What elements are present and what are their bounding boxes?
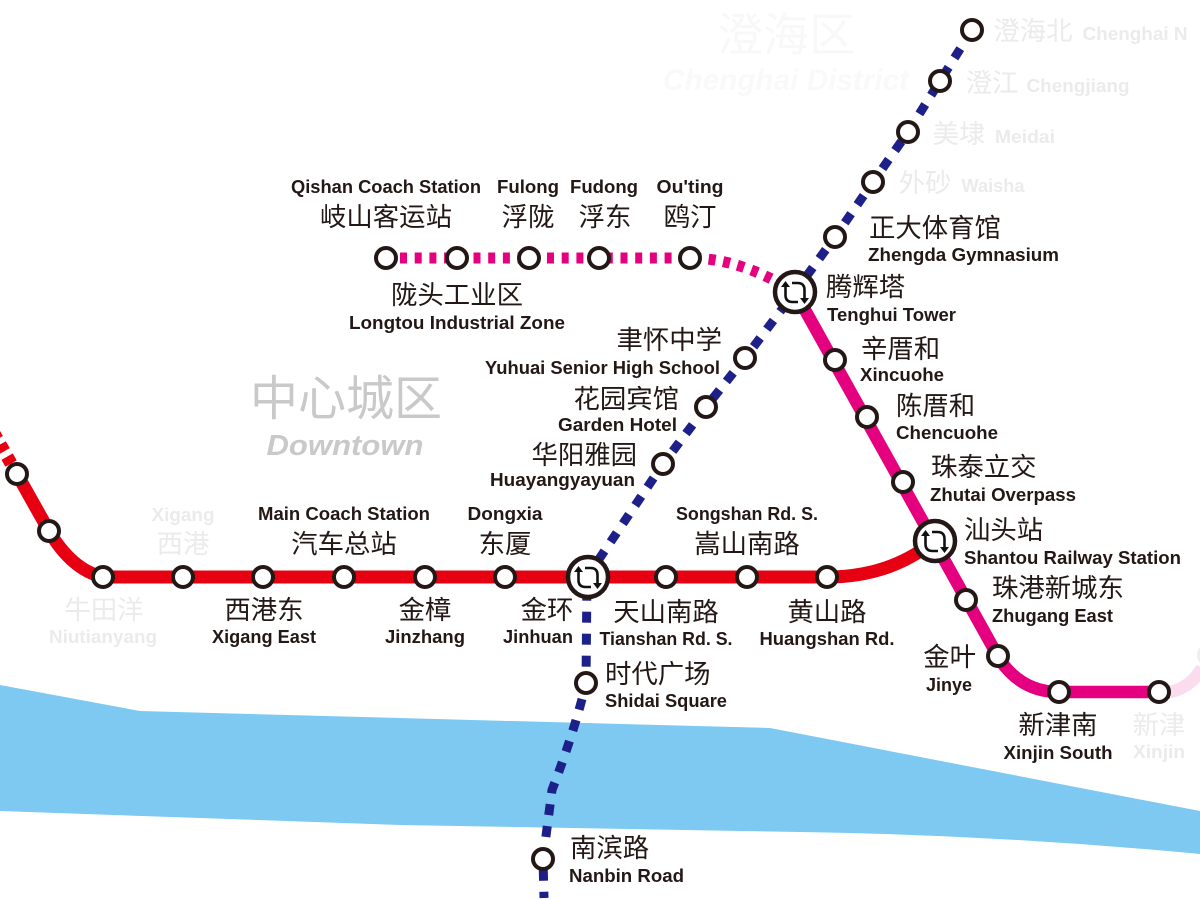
- faded labels: Xigang: [152, 505, 214, 525]
- labels: Line 1: Dongxia: [468, 504, 544, 524]
- labels: right side: 腾辉塔: [826, 272, 905, 302]
- labels: Qishan branch: 鸥汀: [664, 202, 716, 232]
- labels: right side: Zhengda Gymnasium: [868, 245, 1059, 265]
- label: Downtown: 中心城区: [250, 373, 442, 426]
- labels: right side: 陈厝和: [896, 391, 975, 421]
- labels: Qishan branch: Ou'ting: [656, 177, 724, 197]
- labels: Qishan branch: Qishan Coach Station: [291, 177, 481, 197]
- labels: right side: 时代广场: [605, 659, 711, 689]
- faded labels: 澄海北: [993, 16, 1073, 46]
- labels: right side: Chencuohe: [896, 423, 998, 443]
- labels: Qishan branch: Fudong: [570, 177, 638, 197]
- faded labels: 美埭: [933, 119, 985, 149]
- label: Chenghai District: 澄海区: [717, 9, 855, 61]
- district labels: [250, 9, 911, 462]
- labels: Line 1: [212, 504, 894, 649]
- faded labels: Meidai: [995, 127, 1055, 147]
- labels: Line 1: Huangshan Rd.: [760, 629, 894, 649]
- labels: Line 1: 黄山路: [787, 597, 867, 627]
- labels: right side: 南滨路: [570, 833, 649, 863]
- labels: right side: Shantou Railway Station: [964, 548, 1181, 568]
- labels: right side: [569, 213, 1181, 886]
- faded labels: [49, 16, 1188, 762]
- labels: right side: Tenghui Tower: [827, 305, 956, 325]
- labels: Line 1: 东厦: [479, 529, 531, 559]
- interchange: Tenghui Tower: [775, 272, 815, 312]
- faded labels: Niutianyang: [49, 627, 157, 647]
- line: red: [0, 430, 934, 577]
- labels: left of line: 花园宾馆: [573, 384, 679, 414]
- faded labels: Chenghai N: [1082, 24, 1188, 44]
- labels: right side: 汕头站: [964, 515, 1043, 545]
- label: Downtown: [250, 373, 442, 462]
- labels: Qishan branch: 陇头工业区: [391, 280, 523, 310]
- interchange: Jinhuan: [568, 557, 608, 597]
- label: Chenghai District: [663, 9, 911, 97]
- labels: Qishan branch: 浮陇: [502, 202, 554, 232]
- labels: Line 1: Xigang East: [212, 627, 316, 647]
- labels: right side: 辛厝和: [861, 334, 940, 364]
- labels: Qishan branch: Fulong: [497, 177, 559, 197]
- labels: right side: Zhugang East: [992, 606, 1113, 626]
- labels: Line 1: 天山南路: [613, 597, 719, 627]
- line: magenta: [386, 258, 1200, 692]
- label: Xinjin South: 新津南: [1018, 710, 1098, 740]
- faded labels: 西港: [157, 529, 209, 559]
- labels: right side: Nanbin Road: [569, 866, 684, 886]
- labels: Qishan branch: 浮东: [579, 202, 631, 232]
- line: navy: [543, 30, 972, 898]
- labels: Line 1: Main Coach Station: [258, 504, 430, 524]
- faded labels: 澄江: [966, 68, 1018, 98]
- labels: left of line: 聿怀中学: [616, 325, 722, 355]
- labels: Line 1: Songshan Rd. S.: [676, 504, 818, 524]
- labels: Qishan branch: [291, 177, 724, 333]
- station labels: [49, 16, 1188, 762]
- labels: Qishan branch: 岐山客运站: [320, 202, 452, 232]
- labels: Line 1: 汽车总站: [291, 529, 397, 559]
- labels: right side: Xincuohe: [860, 365, 944, 385]
- faded labels: Chengjiang: [1026, 76, 1130, 96]
- label: Xinjin South: [1004, 710, 1112, 763]
- labels: Line 1: Jinzhang: [385, 627, 465, 647]
- labels: Line 1: 西港东: [224, 595, 304, 625]
- label: Chenghai District: Chenghai District: [663, 64, 911, 97]
- labels: left of line: Yuhuai Senior High School: [485, 358, 720, 378]
- labels: Line 1: Jinhuan: [503, 627, 573, 647]
- labels: Line 1: 金环: [521, 595, 573, 625]
- label: Downtown: Downtown: [266, 430, 424, 462]
- labels: Line 1: 嵩山南路: [694, 529, 800, 559]
- faded labels: 新津: [1133, 710, 1185, 740]
- labels: left of line: 华阳雅园: [531, 440, 637, 470]
- labels: right side: Zhutai Overpass: [930, 485, 1076, 505]
- river: [0, 685, 1200, 854]
- labels: left of line: 金叶: [923, 642, 976, 672]
- faded labels: 牛田洋: [64, 595, 144, 625]
- labels: Line 1: Tianshan Rd. S.: [600, 629, 732, 649]
- faded labels: Xinjin: [1133, 742, 1185, 762]
- labels: left of line: [485, 325, 976, 695]
- labels: left of line: Jinye: [926, 675, 972, 695]
- faded labels: Waisha: [962, 176, 1025, 196]
- labels: Qishan branch: Longtou Industrial Zone: [349, 313, 565, 333]
- labels: right side: 珠泰立交: [931, 452, 1037, 482]
- label: Xinjin South: Xinjin South: [1004, 743, 1112, 763]
- interchange: Shantou Railway Station: [915, 521, 955, 561]
- faded labels: 外砂: [899, 168, 951, 198]
- labels: right side: 珠港新城东: [992, 573, 1124, 603]
- labels: left of line: Huayangyayuan: [490, 470, 635, 490]
- labels: left of line: Garden Hotel: [558, 415, 677, 435]
- labels: right side: Shidai Square: [605, 691, 727, 711]
- labels: right side: 正大体育馆: [869, 213, 1001, 243]
- labels: Line 1: 金樟: [399, 595, 451, 625]
